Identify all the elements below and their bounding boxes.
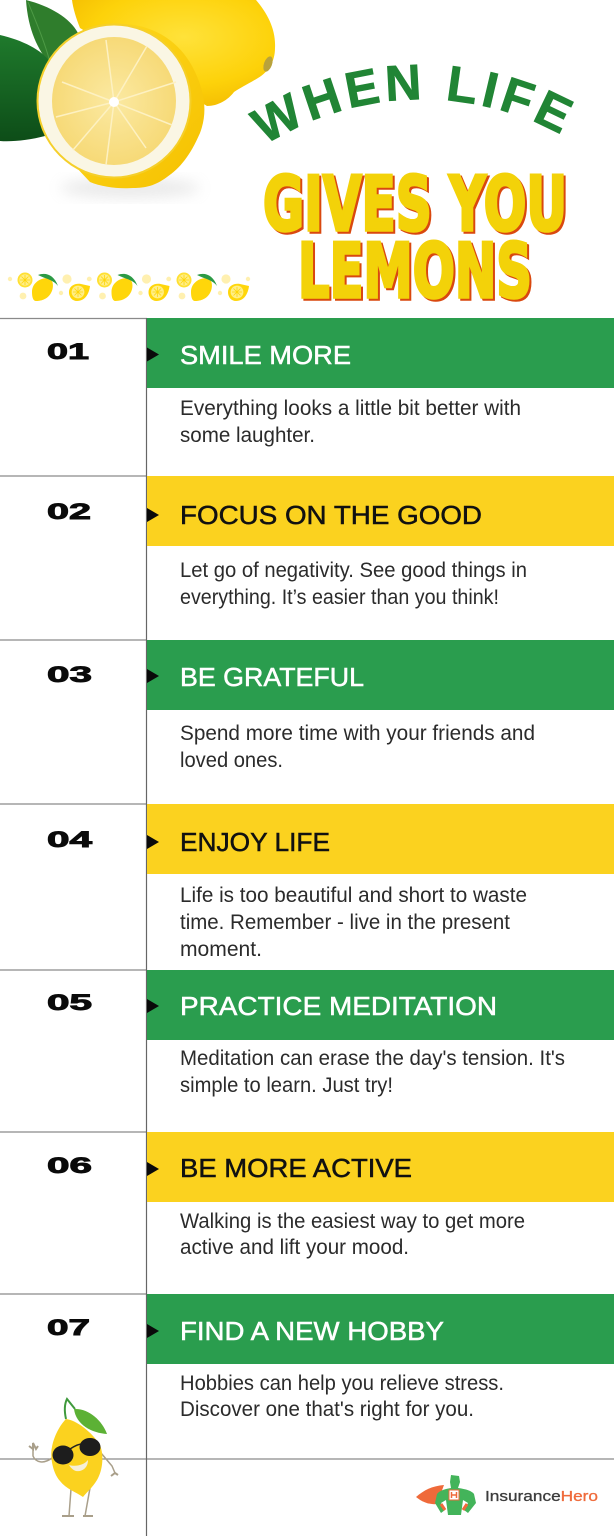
number 01: 01 xyxy=(47,339,89,364)
body: Meditation can erase the day's tension. It's xyxy=(180,1047,565,1070)
stem xyxy=(65,1399,75,1419)
heading: PRACTICE MEDITATION xyxy=(180,991,497,1021)
arrow xyxy=(147,1162,159,1176)
leaf xyxy=(74,1409,107,1434)
icon: half lemon xyxy=(36,24,204,188)
body xyxy=(180,1210,525,1259)
body: some laughter. xyxy=(180,424,315,447)
step 07 xyxy=(47,1294,614,1421)
body xyxy=(180,397,521,447)
arrow xyxy=(147,669,159,683)
body: Let go of negativity. See good things in xyxy=(180,559,527,582)
body: moment. xyxy=(180,938,262,961)
body: Discover one that's right for you. xyxy=(180,1398,474,1421)
body: everything. It’s easier than you think! xyxy=(180,586,499,609)
arrow xyxy=(147,835,159,849)
heading band xyxy=(147,804,614,874)
number 05: 05 xyxy=(47,990,92,1015)
step 03 xyxy=(47,640,614,772)
body: active and lift your mood. xyxy=(180,1236,409,1259)
heading band xyxy=(147,318,614,388)
number 07: 07 xyxy=(47,1315,90,1340)
step 01 xyxy=(47,318,614,447)
body: Life is too beautiful and short to waste xyxy=(180,884,527,907)
step 05 xyxy=(47,970,614,1097)
arrow xyxy=(147,999,159,1013)
heading: FOCUS ON THE GOOD xyxy=(180,500,482,530)
icon: lower leaf xyxy=(0,35,50,141)
icon: whole lemon xyxy=(72,0,275,106)
heading band xyxy=(147,970,614,1040)
step 04 xyxy=(47,804,614,961)
logo: InsuranceHero xyxy=(416,1475,598,1515)
table grid lines xyxy=(0,318,614,1536)
icon: lemon mascot xyxy=(29,1399,118,1516)
heading: FIND A NEW HOBBY xyxy=(180,1316,444,1346)
title: when life: WHEN LIFE xyxy=(248,64,574,141)
arrow xyxy=(147,1324,159,1338)
decorative lemon strip xyxy=(8,272,250,301)
sunglasses xyxy=(70,1444,82,1449)
body: loved ones. xyxy=(180,749,283,772)
heading: BE MORE ACTIVE xyxy=(180,1153,412,1183)
arrow xyxy=(147,348,159,362)
body xyxy=(180,1047,565,1097)
body: Everything looks a little bit better with xyxy=(180,397,521,420)
body xyxy=(180,722,535,772)
step 02 xyxy=(47,476,614,609)
number 02: 02 xyxy=(47,499,91,524)
heading: BE GRATEFUL xyxy=(180,662,364,692)
body: Walking is the easiest way to get more xyxy=(180,1210,525,1233)
smile xyxy=(69,1460,88,1471)
arrow xyxy=(147,508,159,522)
heading band xyxy=(147,640,614,710)
body: Spend more time with your friends and xyxy=(180,722,535,745)
photo: lemons and leaves xyxy=(0,0,275,198)
heading: ENJOY LIFE xyxy=(180,827,330,857)
cape xyxy=(416,1485,444,1504)
body xyxy=(51,1419,102,1497)
body: simple to learn. Just try! xyxy=(180,1074,393,1097)
hero xyxy=(435,1475,476,1515)
body: time. Remember - live in the present xyxy=(180,911,510,934)
step 06 xyxy=(47,1132,614,1259)
number 06: 06 xyxy=(47,1153,92,1178)
wordmark: Insurance Hero xyxy=(485,1488,598,1505)
body xyxy=(180,559,527,609)
body: Hobbies can help you relieve stress. xyxy=(180,1372,504,1395)
body xyxy=(180,1372,504,1421)
body xyxy=(180,884,527,961)
icon: upper leaf xyxy=(26,0,78,64)
heading band xyxy=(147,476,614,546)
number 04: 04 xyxy=(47,827,93,852)
heading band xyxy=(147,1132,614,1202)
heading: SMILE MORE xyxy=(180,340,351,370)
shadow xyxy=(60,178,200,198)
number 03: 03 xyxy=(47,662,92,687)
heading band xyxy=(147,1294,614,1364)
arms and legs xyxy=(33,1447,115,1516)
emblem xyxy=(449,1490,459,1500)
